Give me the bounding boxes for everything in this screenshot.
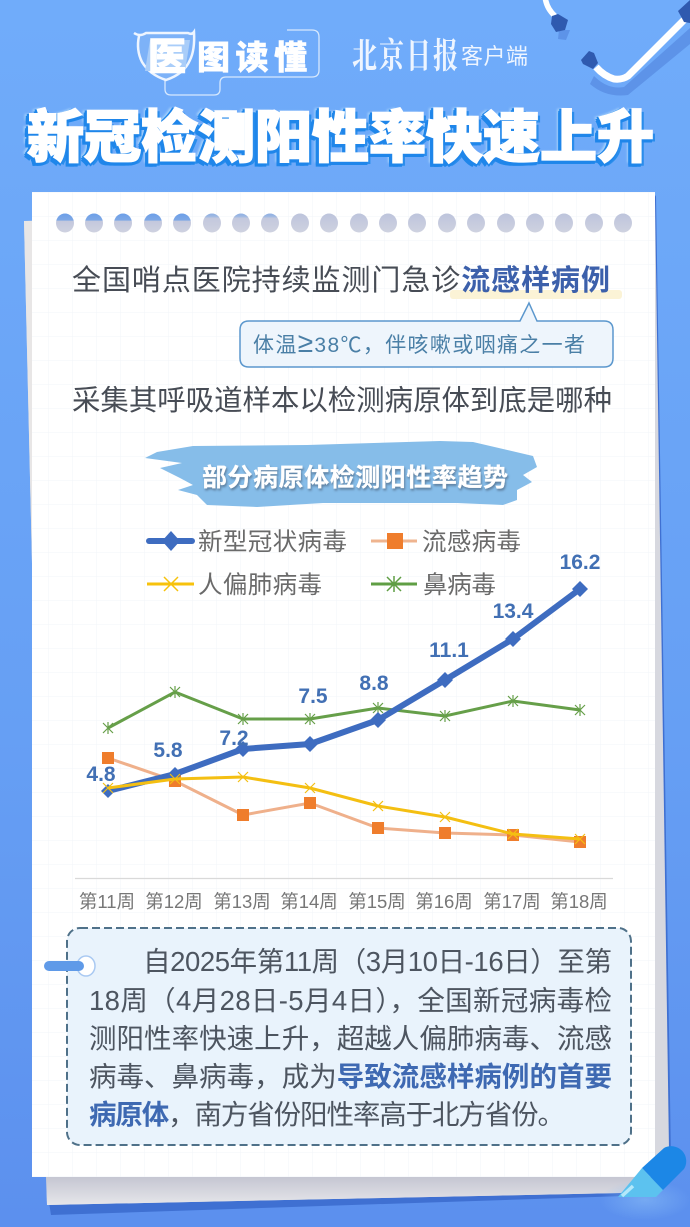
data labels: 新型冠状病毒: 4.8 (86, 763, 116, 786)
logo: 北京日报客户端: 客户端 (461, 44, 528, 69)
line chart (75, 551, 613, 912)
chart legend: 流感病毒 (422, 528, 521, 556)
highlight under 流感样病例 (450, 290, 622, 299)
icon: capsule (600, 1146, 690, 1220)
data labels: 新型冠状病毒: 11.1 (429, 639, 469, 662)
intro line 2: 采集其呼吸道样本以检测病原体到底是哪种 (72, 385, 612, 417)
icon: paper clip pin (44, 956, 95, 976)
x axis: 第15周 (348, 891, 406, 912)
x axis: 第18周 (550, 891, 608, 912)
logo: 医图读懂: 医 (148, 37, 186, 79)
chart heading on brush stroke: 部分病原体检测阳性率趋势 (202, 464, 508, 492)
icon: stethoscope (545, 0, 690, 96)
chart legend: 新型冠状病毒 (198, 528, 347, 556)
intro line 1: 全国哨点医院持续监测门急诊流感样病例 (72, 264, 610, 297)
x axis: 第14周 (280, 891, 338, 912)
paper shadow (47, 195, 671, 1215)
summary box (67, 928, 631, 1145)
data labels: 新型冠状病毒: 7.2 (219, 727, 249, 750)
series: 流感病毒 (102, 752, 586, 848)
back paper left edge (24, 221, 32, 563)
x axis: 第16周 (415, 891, 473, 912)
chart legend: 人偏肺病毒 (198, 571, 322, 599)
chart heading on brush stroke (145, 441, 537, 507)
summary box: 测阳性率快速上升，超越人偏肺病毒、流感 (89, 1023, 612, 1054)
data labels: 新型冠状病毒: 16.2 (560, 551, 600, 574)
summary box: 病原体，南方省份阳性率高于北方省份。 (89, 1099, 565, 1130)
logo: 医图读懂: 图读懂 (197, 39, 307, 76)
logo: 北京日报客户端: 北京日报 (352, 28, 458, 78)
x axis: 第17周 (483, 891, 541, 912)
data labels: 新型冠状病毒: 7.5 (298, 685, 328, 708)
data labels: 新型冠状病毒: 5.8 (153, 739, 183, 762)
binding holes (56, 214, 632, 232)
data labels: 新型冠状病毒: 8.8 (359, 672, 389, 695)
summary box: 病毒、鼻病毒，成为导致流感样病例的首要 (89, 1061, 612, 1092)
x axis: 第12周 (145, 891, 203, 912)
summary box: 18周（4月28日-5月4日），全国新冠病毒检 (89, 985, 612, 1016)
logo: 医图读懂 (134, 30, 319, 95)
logo: 北京日报客户端 (352, 28, 528, 78)
chart legend (147, 528, 521, 599)
callout: definition of influenza-like illness (240, 303, 613, 367)
x axis: 第13周 (213, 891, 271, 912)
series: 鼻病毒 (103, 686, 585, 734)
x axis: 第11周 (79, 891, 135, 912)
series: 新型冠状病毒 (101, 581, 588, 798)
back paper lower edge (46, 1177, 650, 1205)
title: 新冠检测阳性率快速上升 (27, 106, 654, 170)
x axis (75, 878, 613, 912)
data labels: 新型冠状病毒: 13.4 (493, 600, 534, 623)
main paper (32, 192, 655, 1177)
callout: definition of influenza-like illness: 体温≥38℃，伴咳嗽或咽痛之一者 (253, 327, 585, 358)
data labels: 新型冠状病毒 (86, 551, 600, 786)
summary box: 自2025年第11周（3月10日-16日）至第 (143, 946, 612, 977)
back paper (24, 200, 669, 1205)
series: 人偏肺病毒 (103, 772, 585, 844)
chart legend: 鼻病毒 (423, 571, 496, 599)
